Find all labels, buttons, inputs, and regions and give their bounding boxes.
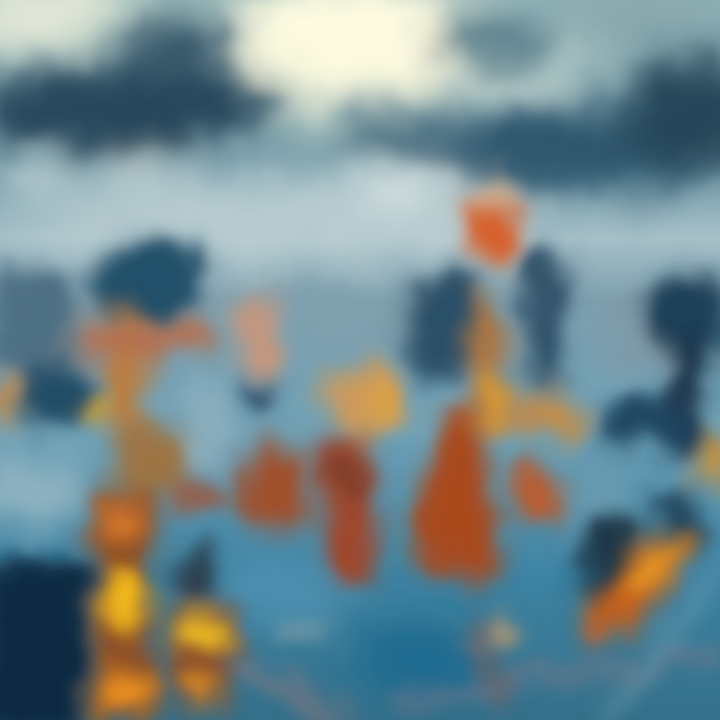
towers: orange and rust structures: [0, 174, 720, 720]
foreground: diagonal pink and teal bands: [235, 570, 720, 720]
glowing yellow lights: [79, 213, 689, 712]
sky: storm clouds and bright gaps: [0, 0, 720, 253]
lower dark buildings and water: [0, 450, 695, 720]
skyline: dark blue silhouettes: [0, 240, 720, 470]
